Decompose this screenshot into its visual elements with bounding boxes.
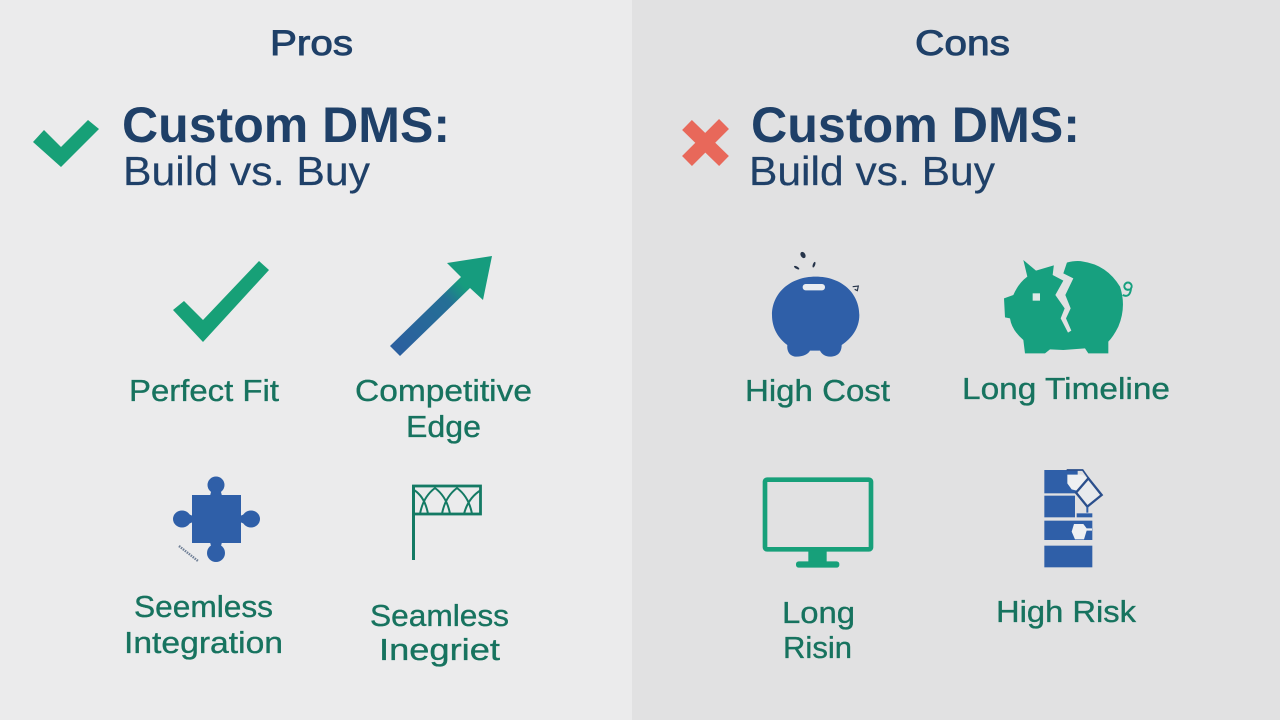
icon: check mark	[173, 261, 269, 342]
label: long risk	[782, 596, 855, 665]
label: perfect fit: Perfect Fit	[129, 374, 280, 408]
panel: pros	[0, 0, 632, 720]
label: long risk: Risin	[783, 631, 852, 665]
icon: lattice flag	[414, 485, 481, 560]
icon: header check mark	[33, 120, 99, 167]
label: seemless integration	[124, 590, 283, 660]
icon: stacked blocks	[1044, 470, 1102, 567]
label: seamless integriet: Seamless	[370, 599, 509, 633]
icon: puzzle piece	[173, 476, 260, 562]
title: custom DMS build vs buy	[122, 97, 450, 194]
label: high cost: High Cost	[745, 374, 891, 408]
item: seemless integration	[124, 476, 283, 660]
title: custom DMS build vs buy: Custom DMS:	[751, 97, 1080, 153]
item: high risk	[996, 470, 1137, 629]
label: competitive edge	[355, 374, 532, 444]
item: long risk	[765, 480, 871, 665]
cons background	[632, 0, 1280, 720]
label: seemless integration: Integration	[124, 626, 283, 660]
heading: cons: Cons	[915, 24, 1010, 63]
label: seemless integration: Seemless	[134, 590, 273, 624]
label: competitive edge: Edge	[406, 410, 481, 444]
label: seamless integriet: Inegriet	[379, 633, 501, 667]
title: custom DMS build vs buy	[749, 97, 1080, 194]
icon: rising arrow	[390, 256, 492, 356]
item: seamless integriet	[370, 485, 509, 667]
title: custom DMS build vs buy: Build vs. Buy	[123, 148, 371, 194]
item: high cost	[745, 251, 891, 408]
icon: cracked piggy bank	[1004, 260, 1132, 353]
label: high risk: High Risk	[996, 595, 1137, 629]
panel: cons	[632, 0, 1280, 720]
item: perfect fit	[129, 261, 280, 408]
heading: pros: Pros	[270, 24, 353, 63]
label: seamless integriet	[370, 599, 509, 667]
title: custom DMS build vs buy: Custom DMS:	[122, 97, 450, 153]
label: long risk: Long	[782, 596, 855, 630]
icon: monitor	[765, 480, 871, 568]
item: long timeline	[962, 260, 1170, 406]
icon: header cross	[687, 124, 724, 161]
label: long timeline: Long Timeline	[962, 372, 1170, 406]
item: competitive edge	[355, 256, 532, 444]
title: custom DMS build vs buy: Build vs. Buy	[749, 148, 996, 194]
icon: blue piggy bank	[772, 251, 859, 357]
label: competitive edge: Competitive	[355, 374, 532, 408]
pros background	[0, 0, 632, 720]
